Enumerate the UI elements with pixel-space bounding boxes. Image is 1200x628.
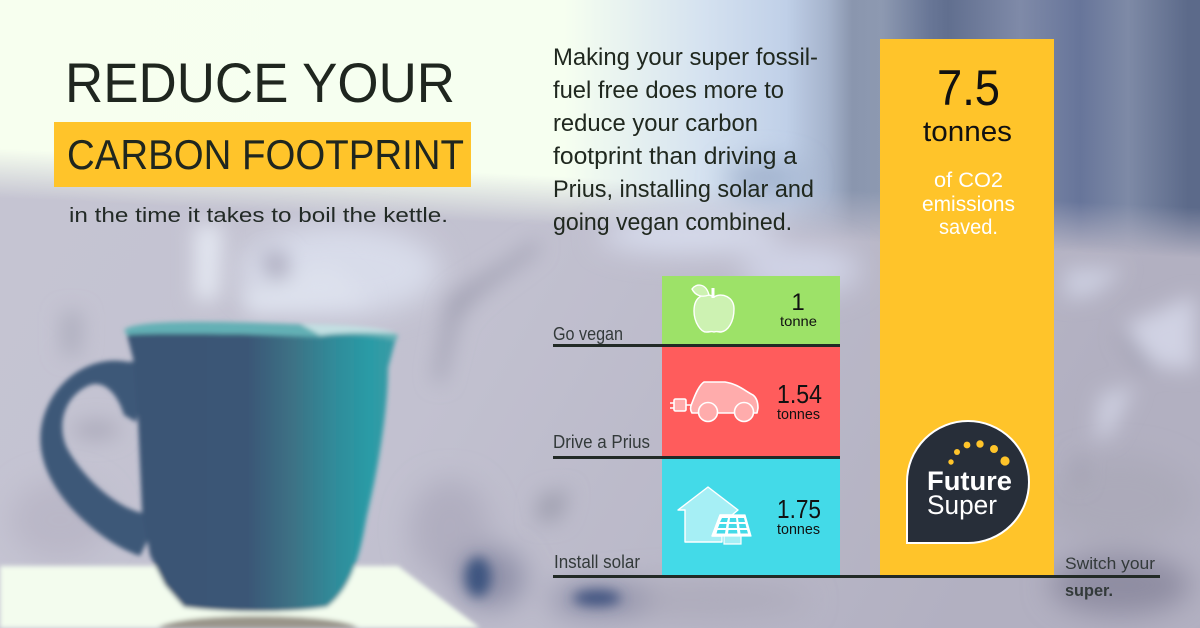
bar: switch your super, 7.5 tonnes [880,39,1054,576]
bar: switch your super, 7.5 tonnes: emissions [922,193,1015,216]
bar: install solar, 1.75 tonnes: 1.75 [777,494,821,524]
bar: go vegan, 1 tonne [662,276,840,344]
label: switch your super [1065,555,1156,600]
subtitle: in the time it takes to boil the kettle. [69,204,448,227]
intro paragraph: Prius, installing solar and [553,176,814,203]
bar: go vegan, 1 tonne: tonne [780,313,817,329]
title: reduce your: REDUCE YOUR [65,51,455,114]
intro paragraph: fuel free does more to [553,77,784,104]
label: install solar: Install solar [554,552,640,572]
logo: Future Super: Super [927,490,997,520]
label: switch your super: Switch your [1065,555,1156,573]
icon: house with solar panel [678,487,751,544]
heading: carbon footprint highlight: CARBON FOOTPRINT [67,131,464,178]
intro paragraph: Making your super fossil- [553,44,818,71]
bar: switch your super, 7.5 tonnes: 7.5 [937,60,1000,116]
bar: go vegan, 1 tonne: 1 [791,289,805,316]
bar: install solar, 1.75 tonnes [662,458,840,575]
bar: drive a prius, 1.54 tonnes [662,344,840,458]
intro paragraph: footprint than driving a [553,143,798,170]
coffee mug on table [0,322,480,628]
intro paragraph: reduce your carbon [553,110,758,137]
intro paragraph [553,44,818,236]
label: drive a prius: Drive a Prius [553,432,650,452]
intro paragraph: going vegan combined. [553,209,792,236]
label: go vegan: Go vegan [553,324,623,344]
bar: install solar, 1.75 tonnes: tonnes [777,521,820,538]
bar: drive a prius, 1.54 tonnes: tonnes [777,406,820,423]
bar: switch your super, 7.5 tonnes: of CO2 [934,169,1003,192]
icon: electric car [670,382,758,422]
bar: drive a prius, 1.54 tonnes: 1.54 [777,379,822,409]
icon: apple [692,285,734,332]
logo: Future Super: Future [927,466,1012,496]
logo: Future Super [907,421,1029,543]
baseline axes [553,344,1160,578]
bar: switch your super, 7.5 tonnes: saved. [939,216,998,239]
heading: carbon footprint highlight [54,122,471,187]
bar: switch your super, 7.5 tonnes: tonnes [923,116,1012,148]
label: switch your super: super. [1065,582,1113,600]
